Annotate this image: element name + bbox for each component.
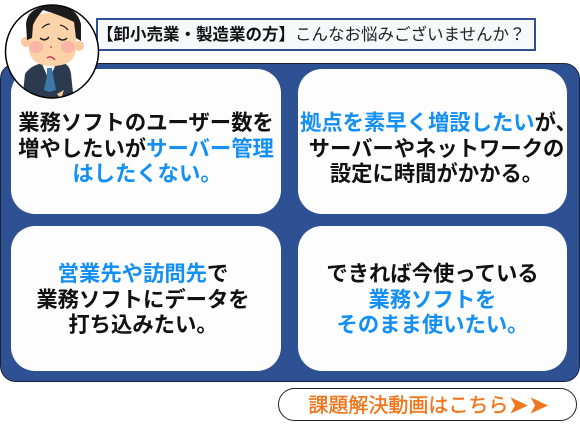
text: keep current software problem: できれば今使っている [326,262,539,286]
main blue panel [0,63,580,382]
text: new sites problem [300,111,577,186]
heading box [96,18,536,51]
panel: field data entry problem [11,226,281,371]
text: user count problem: 業務ソフトのユーザー数を [18,111,274,135]
text: new sites problem: 設定に時間がかかる。 [330,162,543,186]
text: user count problem [18,111,274,186]
icon: worried businessman avatar [4,4,100,99]
text: keep current software problem: 業務ソフトを [368,288,496,312]
text: field data entry problem: 打ち込みたい。 [68,313,218,337]
panel: new sites problem [298,69,567,214]
text: field data entry problem: 営業先や訪問先で [58,262,228,286]
button: issue-solving video link: 課題解決動画はこちら➤➤ [308,392,549,419]
text: field data entry problem [36,262,250,337]
text: user count problem: 増やしたいがサーバー管理 [18,136,274,160]
panel: user count problem [11,69,281,214]
text: keep current software problem [326,262,539,337]
panel: keep current software problem [298,226,567,371]
heading box: 【卸小売業・製造業の方】こんなお悩みございませんか？ [97,26,526,44]
text: keep current software problem: そのまま使いたい。 [337,313,528,337]
text: field data entry problem: 業務ソフトにデータを [36,288,250,312]
text: new sites problem: サーバーやネットワークの [309,136,564,160]
text: user count problem: はしたくない。 [72,162,222,186]
text: new sites problem: 拠点を素早く増設したいが、 [300,111,577,135]
button: issue-solving video link [278,388,577,421]
